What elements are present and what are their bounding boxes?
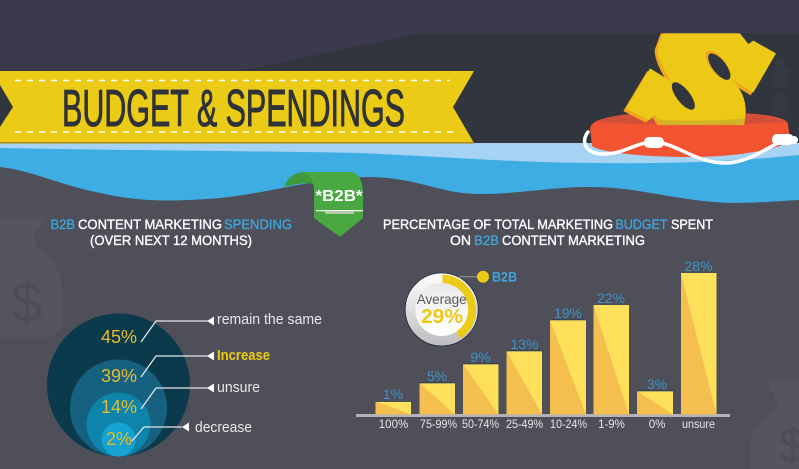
heading: budget: PERCENTAGE OF TOTAL MARKETING xyxy=(383,217,613,232)
icon: money bag left: $ xyxy=(11,271,43,334)
value: 39%: 39% xyxy=(101,366,137,386)
bar: 75-99%: 5% xyxy=(427,368,447,384)
heading: budget xyxy=(383,217,713,248)
bar: 50-74%: 50-74% xyxy=(462,419,499,431)
icon: money bag right xyxy=(750,381,799,469)
label: remain the same: remain the same xyxy=(217,311,322,328)
heading: budget: B2B xyxy=(474,233,499,248)
lifebuoy ring xyxy=(590,112,790,157)
bar: 10-24%: 10-24% xyxy=(550,419,587,431)
heading: budget: ON xyxy=(450,233,471,248)
average value: 29% xyxy=(421,306,463,328)
bar: 50-74% xyxy=(462,349,499,431)
average label: Average xyxy=(417,291,467,307)
arrowheads xyxy=(182,316,214,432)
bar: 25-49% xyxy=(506,336,543,431)
average badge xyxy=(405,273,478,346)
heading: spending: CONTENT MARKETING xyxy=(78,217,222,232)
banner stitching xyxy=(15,80,453,132)
bar: 1-9%: 1-9% xyxy=(598,419,625,431)
banner arrow notch xyxy=(0,85,13,127)
heading: spending xyxy=(50,217,292,248)
value: 2%: 2% xyxy=(106,429,132,449)
title: BUDGET & SPENDINGS xyxy=(62,80,405,138)
bar: 0%: 0% xyxy=(649,419,665,431)
heading: budget: CONTENT MARKETING xyxy=(502,233,645,248)
bar: 100%: 1% xyxy=(383,386,403,402)
ground wave xyxy=(0,167,799,469)
background: night sky xyxy=(0,0,799,34)
banner xyxy=(0,71,474,144)
label: unsure: unsure xyxy=(217,379,260,396)
label: decrease: decrease xyxy=(195,419,252,436)
icon: money bag left xyxy=(0,217,62,337)
bar: 10-24%: 19% xyxy=(554,305,582,321)
ribbon body xyxy=(302,172,363,237)
heading: spending: SPENDING xyxy=(224,217,292,232)
bar: 10-24% xyxy=(550,305,587,431)
bar: unsure xyxy=(681,258,716,431)
rope xyxy=(585,132,798,163)
bar: 100% xyxy=(376,386,411,431)
bar: 100%: 100% xyxy=(379,419,408,431)
ribbon: B2B xyxy=(284,172,363,237)
water xyxy=(0,143,799,240)
value: 14%: 14% xyxy=(101,397,137,417)
bar: 25-49%: 25-49% xyxy=(506,419,543,431)
bar: 0%: 3% xyxy=(647,376,667,392)
legend: B2B xyxy=(459,270,517,284)
lifebuoy top face xyxy=(594,111,786,124)
ribbon text: *B2B* xyxy=(316,188,363,205)
label: increase: Increase xyxy=(217,347,270,364)
bar: 1-9%: 22% xyxy=(597,290,625,306)
bar: unsure: unsure xyxy=(682,419,715,431)
ribbon fold xyxy=(284,172,322,195)
legend: B2B: B2B xyxy=(492,270,517,284)
heading: budget: SPENT xyxy=(671,217,713,232)
bar: unsure: 28% xyxy=(684,258,713,274)
heading: spending: B2B xyxy=(50,217,75,232)
icon: lifebuoy with dollar sign xyxy=(585,33,798,163)
heading: budget: BUDGET xyxy=(616,217,668,232)
heading: spending: (OVER NEXT 12 MONTHS) xyxy=(90,233,252,248)
bar: 0% xyxy=(637,376,673,431)
yellow ring xyxy=(442,274,476,339)
ribbon rule xyxy=(316,210,363,214)
bar: 25-49%: 13% xyxy=(510,336,539,352)
bar: 1-9% xyxy=(594,290,629,431)
background: hill band xyxy=(0,33,799,145)
value: 45%: 45% xyxy=(101,327,137,347)
bar: 75-99% xyxy=(420,368,457,431)
chart: nested circles xyxy=(47,311,322,456)
bar chart xyxy=(376,258,716,431)
dollar sign xyxy=(623,33,776,125)
bar: 75-99%: 75-99% xyxy=(420,419,457,431)
bar: 50-74%: 9% xyxy=(470,349,491,365)
leader lines xyxy=(132,321,208,441)
axis xyxy=(356,414,730,417)
